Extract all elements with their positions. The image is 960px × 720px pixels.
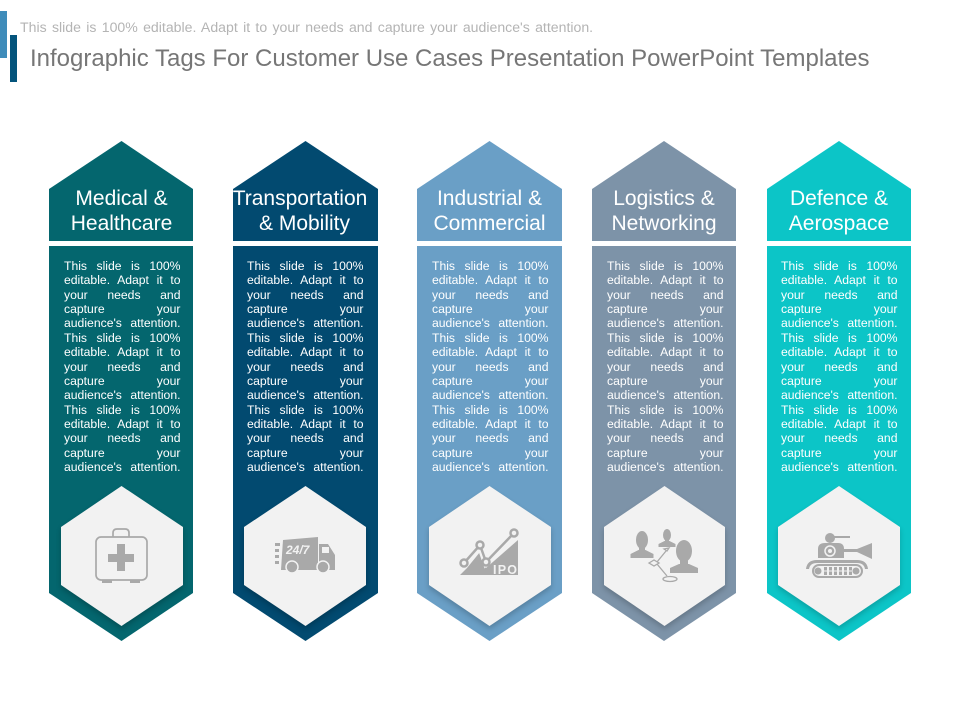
text block: industrial: your needs and — [432, 431, 548, 445]
heading: defence: Aerospace — [789, 212, 889, 235]
text block: medical: audience's attention. — [64, 316, 180, 330]
text block: transportation: capture your — [247, 374, 364, 388]
text block: industrial: editable. Adapt it to — [432, 417, 548, 431]
text block: defence: capture your — [781, 302, 898, 316]
text block: transportation: capture your — [247, 446, 364, 460]
text block: medical: This slide is 100% — [64, 331, 180, 345]
text block: logistics: audience's attention. — [607, 316, 724, 330]
text block: medical: editable. Adapt it to — [64, 417, 180, 431]
icon: people network — [630, 529, 698, 582]
heading: medical: Healthcare — [71, 212, 172, 235]
panel: transportation and mobility — [233, 141, 378, 641]
heading: industrial: Industrial & — [437, 187, 542, 210]
text block: transportation: your needs and — [247, 431, 364, 445]
text block: transportation: audience's attention. — [247, 388, 364, 402]
decorative accent bars — [0, 11, 17, 82]
heading: defence — [788, 187, 889, 235]
heading: logistics: Logistics & — [613, 187, 715, 210]
text block: medical: This slide is 100% — [64, 403, 180, 417]
text block: logistics: audience's attention. — [607, 388, 724, 402]
icon: medical case — [95, 528, 148, 583]
title: Infographic Tags For Customer Use Cases Presentation PowerPoint Templates — [30, 45, 870, 72]
text block: medical: capture your — [64, 302, 180, 316]
text block: transportation: This slide is 100% — [247, 259, 364, 273]
text block: transportation: your needs and — [247, 288, 364, 302]
heading: defence: Defence & — [790, 187, 888, 210]
text block: industrial: your needs and — [432, 288, 548, 302]
text block: logistics: audience's attention. — [607, 460, 724, 474]
icon: IPO growth chart: IPO — [493, 563, 517, 577]
text block: defence: editable. Adapt it to — [781, 417, 898, 431]
heading: transportation: Transportation — [233, 187, 367, 210]
panel: industrial and commercial — [417, 141, 562, 641]
icon: tank — [806, 533, 872, 578]
heading: transportation — [233, 187, 367, 235]
text block: defence: This slide is 100% — [781, 331, 898, 345]
subtitle: This slide is 100% editable. Adapt it to your needs and capture your audience's attention. — [20, 19, 593, 35]
text block: medical: This slide is 100% — [64, 259, 180, 273]
text block: industrial: capture your — [432, 374, 548, 388]
text block: defence: your needs and — [781, 288, 898, 302]
panel shape: transportation — [233, 141, 378, 641]
text block: transportation — [247, 259, 364, 474]
text block: defence: editable. Adapt it to — [781, 273, 898, 287]
panel shape: medical — [49, 141, 193, 641]
text block: transportation: audience's attention. — [247, 316, 364, 330]
text block: logistics: your needs and — [607, 431, 724, 445]
text block: logistics: your needs and — [607, 360, 724, 374]
heading: industrial: Commercial — [433, 212, 546, 235]
text block: defence: audience's attention. — [781, 460, 898, 474]
text block: industrial — [432, 259, 548, 474]
panel shape: defence — [767, 141, 911, 641]
heading: industrial — [433, 187, 546, 235]
text block: industrial: audience's attention. — [432, 388, 548, 402]
text block: medical — [64, 259, 180, 474]
panel shape: industrial — [417, 141, 562, 641]
text block: transportation: editable. Adapt it to — [247, 417, 364, 431]
heading: logistics: Networking — [611, 212, 717, 235]
text block: medical: editable. Adapt it to — [64, 345, 180, 359]
text block: logistics: capture your — [607, 374, 724, 388]
text block: logistics: editable. Adapt it to — [607, 273, 724, 287]
text block: medical: your needs and — [64, 431, 180, 445]
heading: medical: Medical & — [75, 187, 168, 210]
text block: defence: capture your — [781, 374, 898, 388]
icon: 24/7 delivery truck: 24/7 — [285, 543, 311, 557]
text block: industrial: This slide is 100% — [432, 259, 548, 273]
text block: transportation: This slide is 100% — [247, 403, 364, 417]
panel: defence and aerospace — [767, 141, 911, 641]
text block: industrial: audience's attention. — [432, 460, 548, 474]
text block: defence: your needs and — [781, 431, 898, 445]
text block: industrial: editable. Adapt it to — [432, 345, 548, 359]
heading: logistics — [611, 187, 717, 235]
text block: defence — [781, 259, 898, 474]
text block: industrial: This slide is 100% — [432, 403, 548, 417]
panel: logistics and networking — [592, 141, 736, 641]
text block: transportation: audience's attention. — [247, 460, 364, 474]
text block: defence: audience's attention. — [781, 316, 898, 330]
text block: medical: audience's attention. — [64, 388, 180, 402]
text block: logistics: capture your — [607, 446, 724, 460]
text block: logistics: This slide is 100% — [607, 331, 724, 345]
text block: medical: your needs and — [64, 360, 180, 374]
text block: logistics: This slide is 100% — [607, 403, 724, 417]
text block: transportation: editable. Adapt it to — [247, 273, 364, 287]
text block: transportation: capture your — [247, 302, 364, 316]
text block: medical: audience's attention. — [64, 460, 180, 474]
text block: defence: capture your — [781, 446, 898, 460]
text block: logistics: your needs and — [607, 288, 724, 302]
heading: medical — [71, 187, 172, 235]
icon: IPO growth chart — [459, 528, 519, 577]
text block: medical: capture your — [64, 374, 180, 388]
panel: medical and healthcare — [49, 141, 193, 641]
text block: transportation: editable. Adapt it to — [247, 345, 364, 359]
text block: defence: editable. Adapt it to — [781, 345, 898, 359]
text block: industrial: capture your — [432, 446, 548, 460]
text block: industrial: audience's attention. — [432, 316, 548, 330]
text block: transportation: This slide is 100% — [247, 331, 364, 345]
panel shape: logistics — [592, 141, 736, 641]
text block: defence: This slide is 100% — [781, 259, 898, 273]
icon: 24/7 delivery truck — [275, 537, 335, 572]
text block: defence: your needs and — [781, 360, 898, 374]
text block: logistics: capture your — [607, 302, 724, 316]
text block: logistics: This slide is 100% — [607, 259, 724, 273]
text block: logistics: editable. Adapt it to — [607, 417, 724, 431]
text block: industrial: This slide is 100% — [432, 331, 548, 345]
text block: medical: your needs and — [64, 288, 180, 302]
text block: industrial: capture your — [432, 302, 548, 316]
text block: industrial: your needs and — [432, 360, 548, 374]
text block: logistics — [607, 259, 724, 474]
heading: transportation: & Mobility — [259, 212, 350, 235]
text block: defence: This slide is 100% — [781, 403, 898, 417]
text block: medical: capture your — [64, 446, 180, 460]
text block: transportation: your needs and — [247, 360, 364, 374]
text block: logistics: editable. Adapt it to — [607, 345, 724, 359]
text block: industrial: editable. Adapt it to — [432, 273, 548, 287]
text block: defence: audience's attention. — [781, 388, 898, 402]
text block: medical: editable. Adapt it to — [64, 273, 180, 287]
